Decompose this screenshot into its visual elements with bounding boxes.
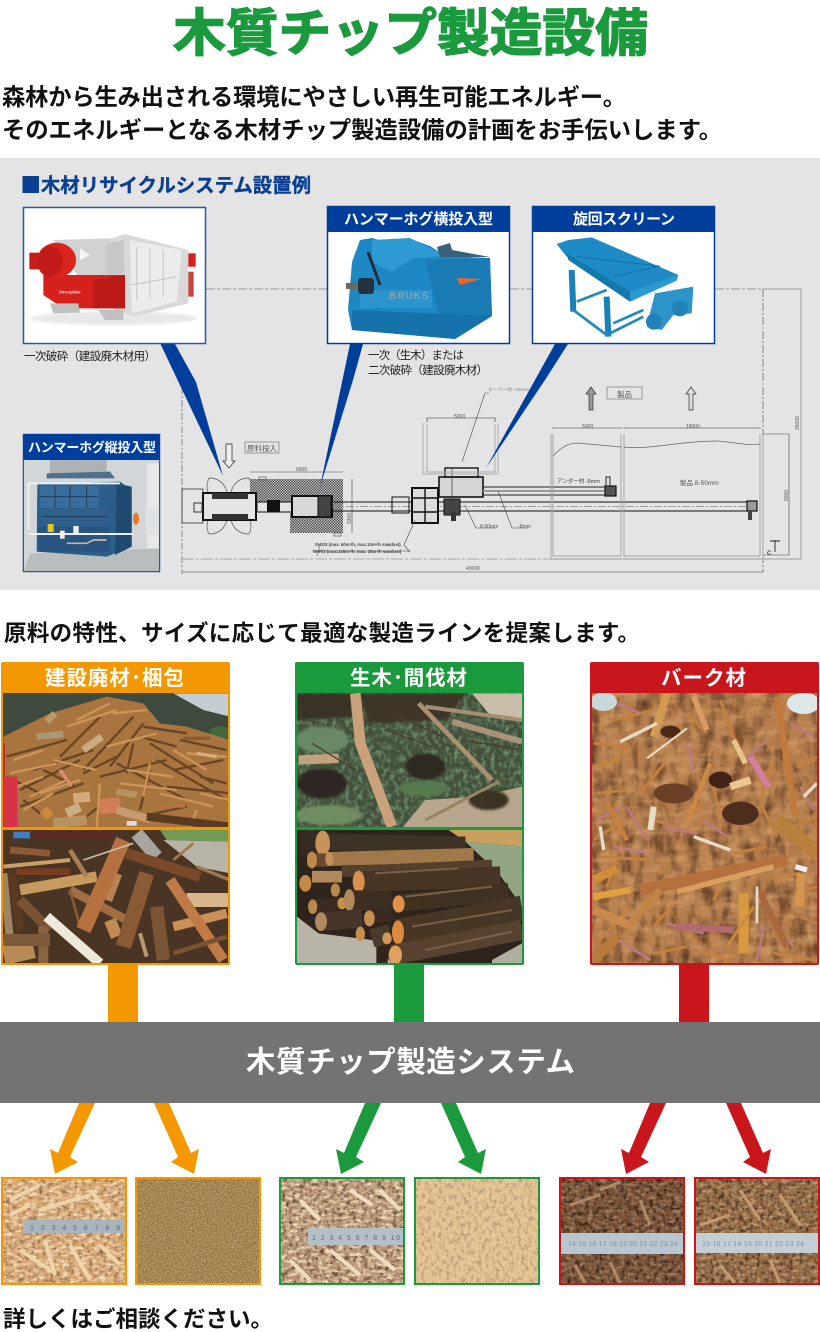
drawing labels: 9000	[784, 490, 790, 501]
card header label: ハンマーホグ横投入型	[344, 210, 493, 228]
panel: construction waste wood	[1, 662, 230, 965]
ruler: 1 2 3 4 5 6 7 8 9 10	[312, 1235, 400, 1242]
arrow: orange right	[154, 1103, 199, 1174]
arrow: red left	[621, 1103, 666, 1174]
photo: vertical hammer hog	[23, 458, 161, 573]
card header	[23, 434, 160, 460]
icon: red and grey shredder	[29, 234, 197, 325]
arrow: green left	[336, 1103, 381, 1174]
section text: 原料の特性、サイズに応じて最適な製造ラインを提案します。	[4, 620, 640, 646]
card: primary crusher	[24, 208, 206, 344]
panel heading: バーク材	[661, 667, 746, 690]
photo: shredded bark	[590, 692, 820, 963]
intro text	[2, 84, 722, 143]
chip sample: red right	[695, 1178, 819, 1284]
drawing labels: SHR/3 (max.120m³/h, max. 25m³/h sawdust)	[313, 549, 402, 554]
drawing labels: 製品 8-50mm	[680, 478, 719, 487]
photo: pile of waste wood	[3, 693, 230, 828]
intro text: そのエネルギーとなる木材チップ製造設備の計画をお手伝いします。	[2, 117, 722, 143]
ruler: 15 16 17 18 19 20 21 22 23 24	[702, 1241, 804, 1248]
plant layout drawing	[182, 289, 801, 574]
caption: primary or secondary crushing: 二次破砕（建設廃木材）	[368, 363, 488, 377]
drawing labels: 5300	[347, 513, 353, 524]
panel heading: 生木･間伐材	[350, 667, 467, 690]
drawing labels: 原料投入	[247, 443, 277, 453]
band label: 木質チップ製造システム	[246, 1046, 575, 1079]
drawing labels	[247, 386, 801, 572]
arrow: orange left	[50, 1103, 95, 1174]
chip sample: green coarse	[280, 1178, 404, 1284]
icon: blue vibrating screen	[557, 237, 693, 337]
drawing labels: 43000	[466, 566, 480, 572]
panel heading: 建設廃材･梱包	[45, 667, 184, 690]
card header label: 旋回スクリーン	[573, 211, 675, 228]
pointer: horizontal hammer hog	[320, 344, 363, 487]
panel: wood recycling system layout example	[0, 158, 820, 590]
ruler: 1 2 3 4 5 6 7 8 9	[30, 1225, 120, 1232]
drawing labels: SHS/3 (max. 60m³/h, max.10m³/h sawdust)	[315, 542, 401, 547]
divider between photos	[297, 827, 522, 830]
photo: stacked logs	[297, 830, 522, 964]
drawing labels: 5000	[582, 424, 593, 430]
drawing labels: 25000	[795, 416, 801, 430]
drawing labels: 18000	[686, 424, 700, 430]
card header	[532, 206, 715, 232]
card: vertical hammer hog	[23, 434, 161, 573]
arrow: green right	[441, 1103, 486, 1174]
drawing labels: アンダー材 -8mm	[557, 477, 600, 485]
chip sample: green fine	[415, 1178, 539, 1284]
connector: green	[394, 965, 424, 1022]
caption: primary or secondary crushing: 一次（生木）または	[368, 348, 464, 362]
ruler: 14 15 16 17 18 19 20 21 22 23 24	[568, 1241, 678, 1248]
arrow: red right	[726, 1103, 771, 1174]
title: 木質チップ製造設備	[173, 5, 648, 62]
pointer: primary crusher	[160, 344, 223, 476]
drawing labels: 製品	[617, 389, 632, 399]
drawing labels: -8mm	[518, 524, 531, 530]
connector: red	[679, 965, 709, 1022]
icon: blue hammer hog machine	[346, 238, 492, 339]
connector: orange	[108, 965, 138, 1022]
card header	[327, 206, 510, 232]
chip sample: red left	[560, 1178, 684, 1284]
icon: red and grey shredder: Vecoplan	[59, 289, 81, 295]
card header label: ハンマーホグ縦投入型	[28, 440, 156, 455]
panel: green wood and thinnings	[295, 662, 524, 965]
drawing labels: 6900	[296, 467, 307, 473]
photo: broken timber	[3, 830, 230, 963]
drawing labels: 8-50mm	[480, 524, 498, 530]
photo: felled trees	[295, 693, 522, 828]
drawing labels: オーバー材 +50mm	[488, 386, 529, 393]
caption: primary or secondary crushing	[368, 348, 488, 377]
caption: primary crusher: 一次破砕（建設廃木材用）	[24, 349, 156, 363]
icon: blue hammer hog machine: BRUKS	[389, 291, 430, 302]
footer text: 詳しくはご相談ください。	[3, 1306, 273, 1332]
panel: bark	[590, 662, 820, 965]
system band	[0, 1022, 820, 1103]
drawing labels: c	[767, 548, 771, 557]
panel heading: 木材リサイクルシステム設置例	[41, 175, 311, 197]
intro text: 森林から生み出される環境にやさしい再生可能エネルギー。	[2, 84, 626, 110]
card: rotary screen	[532, 206, 715, 344]
pointer: rotary screen	[486, 344, 568, 468]
divider between photos	[3, 827, 228, 830]
card: horizontal hammer hog	[327, 206, 510, 344]
drawing labels: 5000	[454, 414, 465, 420]
chip sample: orange fine	[136, 1178, 260, 1284]
chip sample: orange coarse	[2, 1178, 126, 1284]
